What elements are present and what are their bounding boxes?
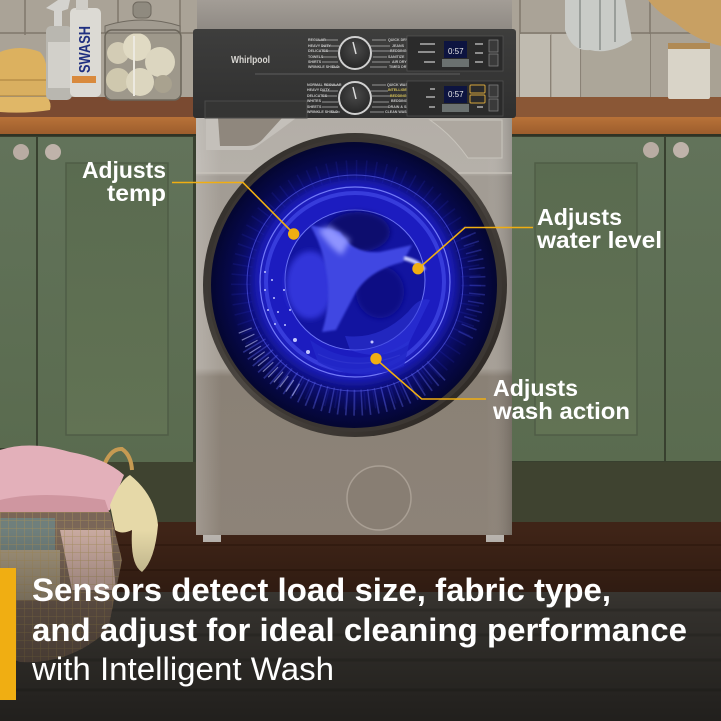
dryer time: 0:57 (448, 47, 464, 56)
label: adjusts water level: Adjusts (537, 204, 622, 230)
leader: wash action (370, 353, 486, 399)
back pockets (326, 212, 390, 252)
washer dial (339, 82, 371, 114)
detergent drawer (206, 118, 296, 150)
brand logo: Whirlpool (231, 54, 270, 66)
dial labels: TIMED DRY (389, 65, 409, 69)
cabinets right (512, 136, 721, 462)
dial labels: BEDDING (390, 49, 407, 53)
lower body (196, 118, 512, 535)
dial labels: BEDDING (391, 99, 408, 103)
dial labels: BEDDING (390, 94, 407, 98)
cabinets left (0, 136, 196, 462)
dial labels: SANITIZE (388, 55, 405, 59)
dial labels: TOWELS (308, 55, 324, 59)
mug (668, 43, 721, 99)
perforation dots (264, 271, 374, 354)
feet (203, 533, 221, 542)
label: adjusts wash action (492, 375, 630, 424)
dial labels: DRAIN & SPIN (388, 105, 413, 109)
label: adjusts water level (536, 204, 662, 253)
dial labels: QUICK DRY (388, 38, 409, 42)
seam (196, 172, 512, 174)
radial streaks (241, 170, 478, 403)
dryer display group (407, 36, 503, 71)
dial labels: INTELLIGENT (388, 88, 412, 92)
label: adjusts water level: water level (536, 227, 662, 253)
control panel (193, 29, 516, 118)
wall tiles (0, 0, 721, 100)
headline: and adjust for ideal cleaning performance (32, 612, 687, 648)
label: adjusts wash action: Adjusts (493, 375, 578, 401)
knob: right door one (643, 142, 659, 158)
yellow cloth top right (648, 0, 721, 46)
bottle: SWASH: SWASH (77, 26, 94, 73)
dial labels: DELICATES (307, 94, 328, 98)
dial labels: WRINKLE SHIELD (307, 110, 338, 114)
hanging cloth (565, 0, 632, 51)
dial labels: QUICK WASH (387, 83, 411, 87)
drum interior (241, 170, 478, 403)
headline: with Intelligent Wash (31, 651, 334, 687)
label: adjusts temp: temp (107, 180, 166, 206)
headline (31, 572, 687, 687)
washer tower (193, 0, 516, 542)
upper unit (197, 0, 512, 30)
leader: water level (412, 228, 533, 274)
dial labels: SHEETS (307, 105, 322, 109)
accent bar (0, 568, 16, 700)
label: adjusts temp: Adjusts (82, 157, 166, 183)
dial labels: WHITES (307, 99, 322, 103)
towels stack (0, 48, 51, 113)
dryer dial (339, 37, 371, 69)
dial labels: SHIRTS (308, 60, 322, 64)
headline: Sensors detect load size, fabric type, (32, 572, 611, 608)
dial labels: AIR DRY (392, 60, 407, 64)
dial tick lines (318, 40, 390, 112)
floor (0, 522, 721, 721)
dial labels: CLEAN WASHER (385, 110, 415, 114)
dial labels: JEANS (392, 44, 405, 48)
dial labels (307, 38, 415, 114)
dial labels: HEAVY DUTY (307, 88, 330, 92)
dial labels: DELICATES (308, 49, 329, 53)
drum glow (255, 180, 455, 380)
label: adjusts wash action: wash action (492, 398, 630, 424)
washer time: 0:57 (448, 90, 464, 99)
counter left (0, 97, 196, 137)
right recess (430, 120, 502, 158)
washer display group (407, 81, 503, 116)
dial labels: WRINKLE SHIELD (308, 65, 339, 69)
dial labels: REGULAR (308, 38, 326, 42)
dial labels: HEAVY DUTY (308, 44, 331, 48)
laundry basket (0, 445, 158, 662)
bottle: SWASH (70, 0, 101, 97)
knob: left door one (13, 144, 29, 160)
photo darkening overlay (0, 530, 721, 721)
baffle spokes (310, 225, 412, 332)
glass jar with dryer balls (105, 2, 181, 100)
label: adjusts temp (82, 157, 166, 206)
bottle: spray (46, 0, 72, 100)
counter right (512, 97, 721, 137)
knob: right door two (673, 142, 689, 158)
toe kick (0, 462, 721, 524)
washer door (203, 133, 507, 437)
dial labels: NORMAL REGULAR (307, 83, 342, 87)
leader: temp (172, 182, 299, 240)
knob: left door two (45, 144, 61, 160)
base access door (347, 466, 411, 530)
